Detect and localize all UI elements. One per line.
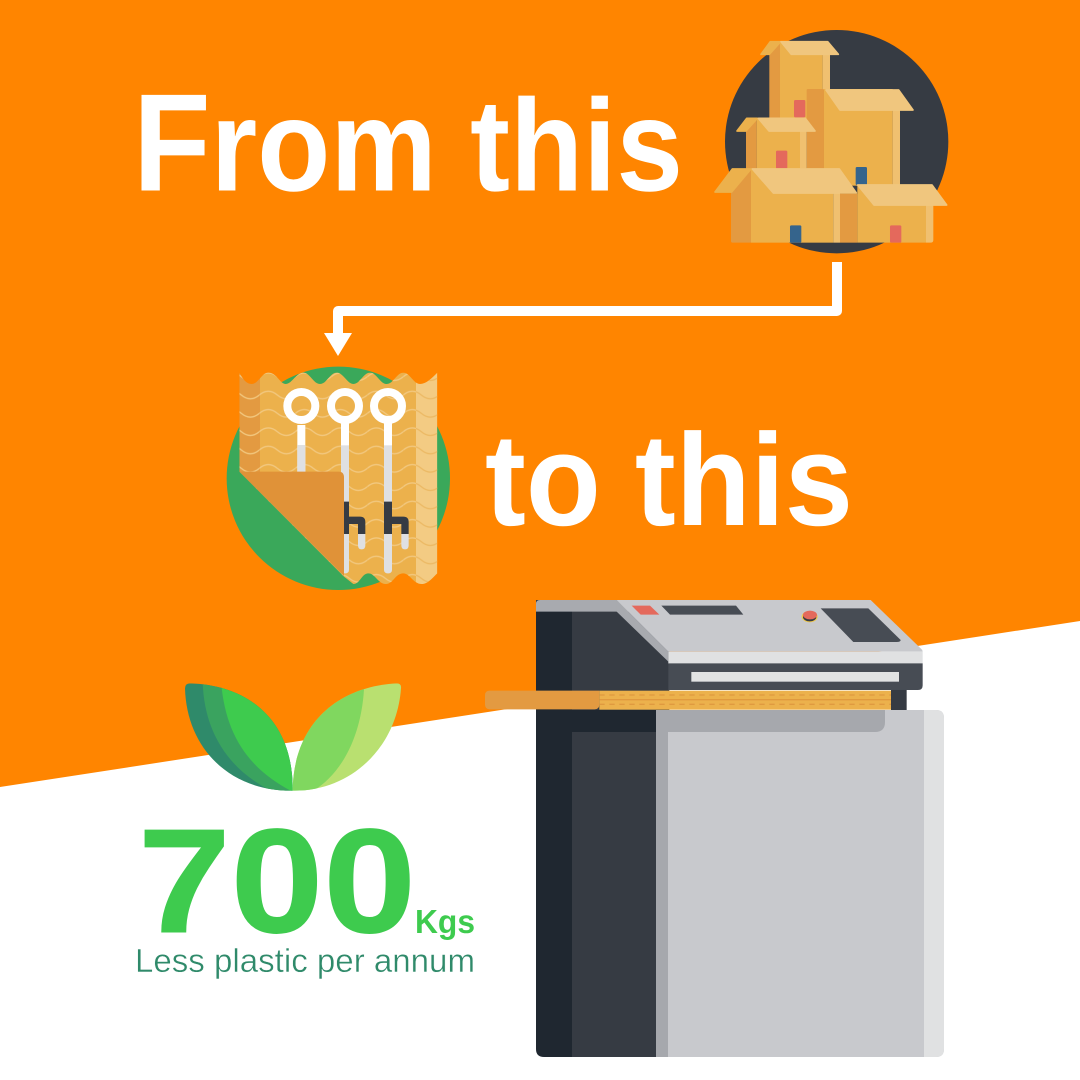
left leaf <box>185 683 293 791</box>
red indicator <box>632 606 659 615</box>
white diagonal lower section <box>0 621 1080 1080</box>
right leaf <box>292 684 401 791</box>
icon: cardboard boxes <box>715 30 948 253</box>
stat: 700: 700 <box>138 799 416 964</box>
caption: less plastic: Less plastic per annum <box>135 942 475 979</box>
control panel <box>821 608 901 642</box>
cardboard strip <box>485 691 891 710</box>
machine base <box>536 700 944 1057</box>
stat unit: Kgs: Kgs <box>415 903 475 940</box>
arrow: from boxes to sheet <box>324 262 837 356</box>
display <box>661 606 743 615</box>
machine head <box>485 600 923 710</box>
heading: to this: to this <box>485 406 853 553</box>
stop button <box>802 611 818 622</box>
icon: green leaves <box>185 683 401 791</box>
icon: corrugated sheet with staples <box>227 367 450 590</box>
heading: From this: From this <box>133 66 683 220</box>
machine: cardboard perforator <box>485 600 944 1057</box>
